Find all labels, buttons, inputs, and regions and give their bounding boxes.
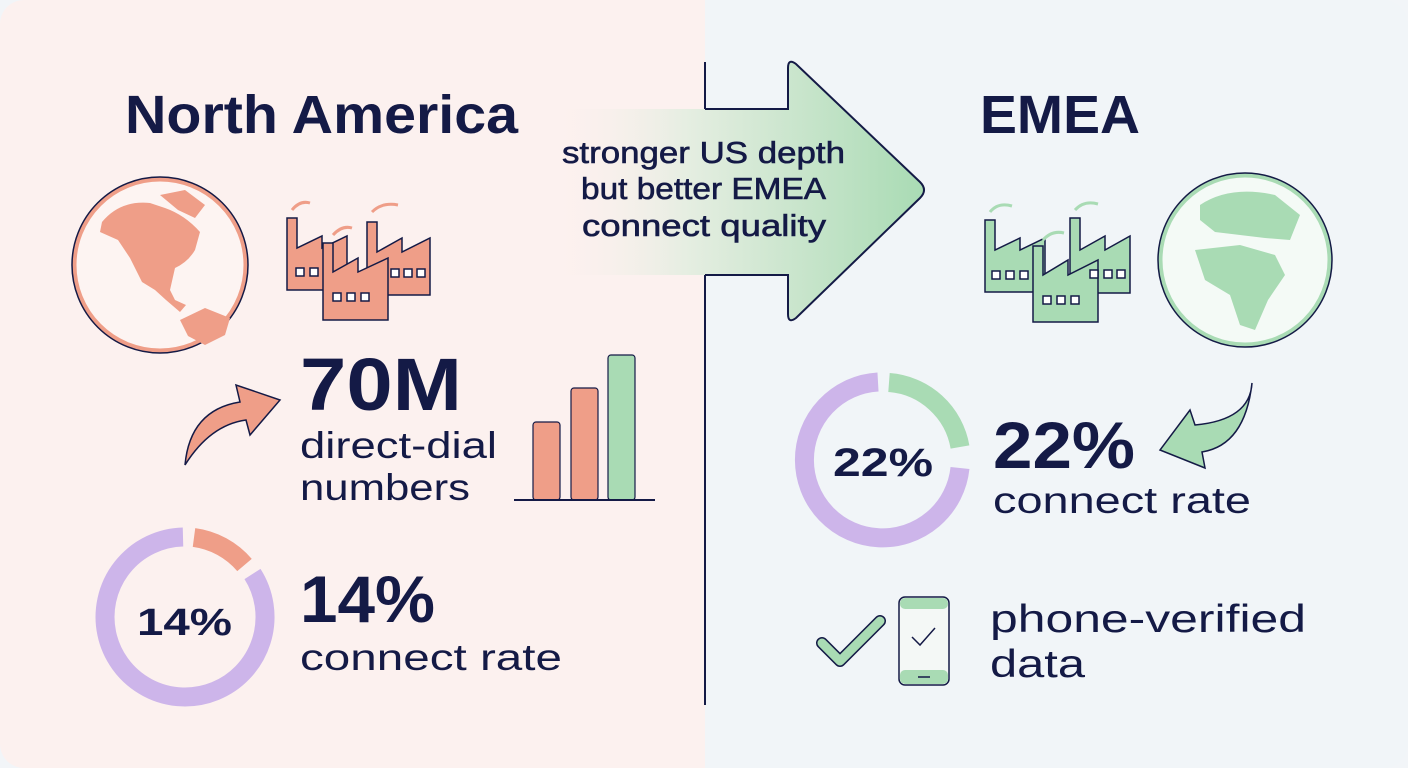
title: North America: North America	[125, 85, 519, 145]
donut chart NA 14%	[105, 537, 265, 697]
donut chart NA 14%: 14%	[137, 602, 232, 644]
bar chart	[514, 355, 655, 500]
arrow: comparison callout	[555, 62, 924, 320]
stat: 14% connect rate: connect rate	[300, 637, 562, 678]
stat: 70M: 70M	[300, 343, 462, 426]
callout text: connect quality	[582, 208, 827, 243]
icon: checkmark	[822, 621, 880, 661]
icon: factories NA	[287, 202, 430, 320]
stat: 70M: direct-dial	[300, 425, 497, 466]
icon: globe EMEA	[1158, 173, 1332, 347]
title: EMEA: EMEA	[980, 85, 1140, 145]
text: phone-verified data	[990, 598, 1306, 686]
callout text: stronger US depth	[562, 135, 845, 170]
callout text	[562, 135, 845, 243]
callout text: but better EMEA	[581, 171, 826, 206]
donut chart EMEA 22%	[804, 382, 960, 538]
stat: 22% connect rate	[993, 408, 1251, 521]
icon: factories EMEA	[985, 203, 1130, 322]
stat: 14% connect rate	[300, 562, 562, 678]
divider line	[704, 62, 706, 705]
icon: curved arrow down-left	[1160, 383, 1252, 468]
icon: curved arrow up	[185, 385, 280, 465]
icon: globe Americas	[72, 177, 248, 353]
stat: 70M	[300, 343, 497, 508]
stat: 22% connect rate: 22%	[993, 408, 1135, 482]
stat: 70M: numbers	[300, 467, 470, 508]
text: phone-verified data: phone-verified	[990, 598, 1306, 641]
stat: 14% connect rate: 14%	[300, 562, 435, 636]
text: phone-verified data: data	[990, 643, 1085, 686]
donut chart EMEA 22%: 22%	[833, 441, 933, 485]
background left panel	[0, 0, 705, 768]
icon: phone	[899, 597, 949, 685]
stat: 22% connect rate: connect rate	[993, 480, 1251, 521]
